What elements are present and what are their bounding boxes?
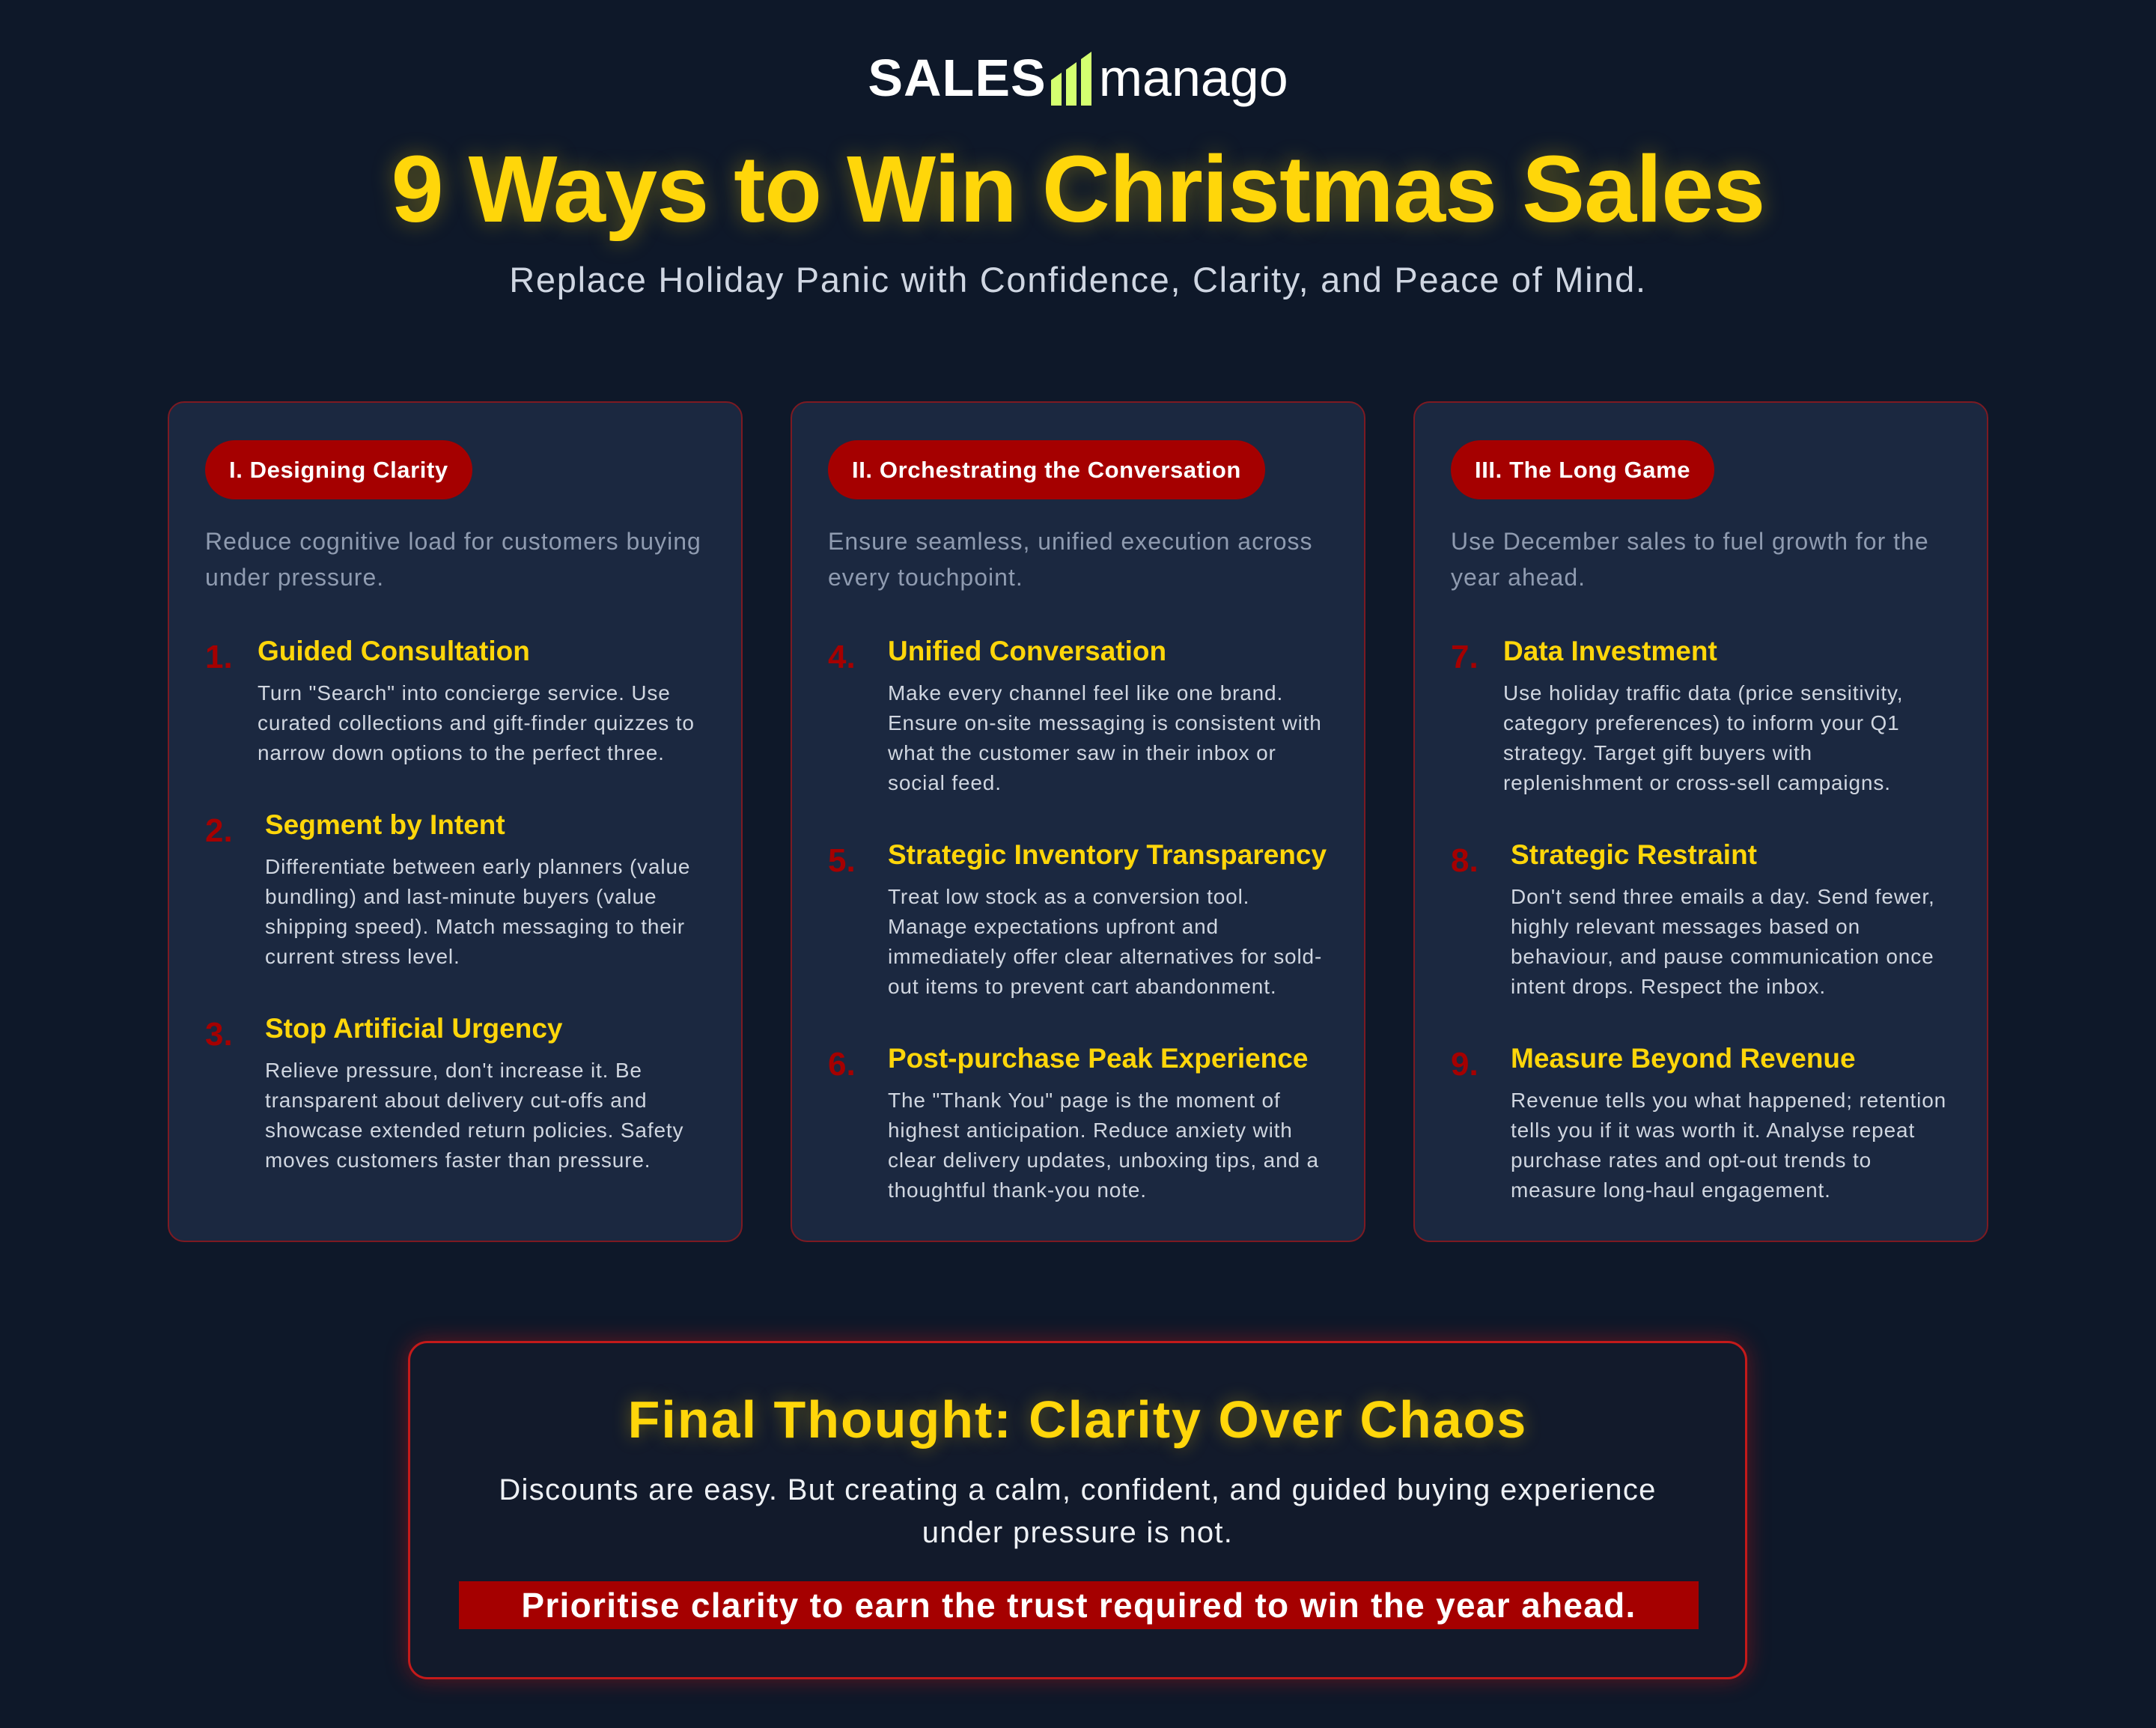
item 1: 1. <box>205 639 233 675</box>
panel description: Reduce cognitive load for customers buying under pressure. <box>205 528 701 591</box>
title: 9 Ways to Win Christmas Sales <box>392 136 1764 242</box>
item 4 <box>828 636 1322 794</box>
item 5 <box>828 839 1327 998</box>
item 4: Unified Conversation <box>888 636 1166 666</box>
final text <box>499 1473 1657 1549</box>
pill heading <box>828 440 1265 499</box>
item 7: Use holiday traffic data (price sensitivity, category preferences) to inform your Q1 strategy. Target gift buyers with replenishment or cross-sell campaigns. <box>1503 681 1903 794</box>
item 3: 3. <box>205 1016 233 1053</box>
logo: SALES <box>868 49 1047 107</box>
panel description: Ensure seamless, unified execution across every touchpoint. <box>828 528 1313 591</box>
item 9 <box>1451 1043 1946 1202</box>
panel description: Use December sales to fuel growth for the year ahead. <box>1451 528 1929 591</box>
red banner: Prioritise clarity to earn the trust required to win the year ahead. <box>521 1586 1636 1625</box>
pill heading: I. Designing Clarity <box>229 457 448 483</box>
pill heading <box>205 440 472 499</box>
item 7 <box>1451 636 1903 794</box>
item 6: Post-purchase Peak Experience <box>888 1043 1308 1074</box>
item 2: Differentiate between early planners (value bundling) and last-minute buyers (value shipping speed). Match messaging to their current stress level. <box>265 855 690 968</box>
panel: designing clarity <box>168 401 743 1242</box>
item 2: Segment by Intent <box>265 809 505 840</box>
logo <box>868 49 1288 107</box>
pill heading: III. The Long Game <box>1475 457 1690 483</box>
item 3: Stop Artificial Urgency <box>265 1013 562 1044</box>
pill heading: II. Orchestrating the Conversation <box>852 457 1241 483</box>
item 6 <box>828 1043 1319 1202</box>
item 9: Revenue tells you what happened; retention tells you if it was worth it. Analyse repeat purchase rates and opt-out trends to measure long-haul engagement. <box>1511 1089 1946 1202</box>
item 8: Don't send three emails a day. Send fewer, highly relevant messages based on behaviour, and pause communication once intent drops. Respect the inbox. <box>1511 885 1935 998</box>
item 2 <box>205 809 690 968</box>
item 8: 8. <box>1451 842 1479 879</box>
panel: orchestrating the conversation <box>791 401 1365 1242</box>
item 1 <box>205 636 695 764</box>
item 8 <box>1451 839 1935 998</box>
item 9: Measure Beyond Revenue <box>1511 1043 1856 1074</box>
item 4: Make every channel feel like one brand. Ensure on-site messaging is consistent with what the customer saw in their inbox or social feed. <box>888 681 1322 794</box>
item 3: Relieve pressure, don't increase it. Be transparent about delivery cut-offs and showcase extended return policies. Safety moves customers faster than pressure. <box>265 1059 683 1172</box>
subtitle: Replace Holiday Panic with Confidence, Clarity, and Peace of Mind. <box>509 260 1647 299</box>
panel: the long game <box>1413 401 1988 1242</box>
item 2: 2. <box>205 812 233 849</box>
callout: final thought <box>408 1341 1747 1679</box>
item 5: 5. <box>828 842 856 879</box>
item 5: Strategic Inventory Transparency <box>888 839 1327 870</box>
item 7: Data Investment <box>1503 636 1717 666</box>
item 4: 4. <box>828 639 856 675</box>
item 5: Treat low stock as a conversion tool. Manage expectations upfront and immediately offer clear alternatives for sold-out items to prevent cart abandonment. <box>888 885 1322 998</box>
item 1: Guided Consultation <box>258 636 530 666</box>
item 9: 9. <box>1451 1046 1479 1083</box>
final text: under pressure is not. <box>922 1516 1233 1549</box>
item 3 <box>205 1013 683 1172</box>
item 7: 7. <box>1451 639 1479 675</box>
final heading: Final Thought: Clarity Over Chaos <box>628 1390 1527 1449</box>
item 6: 6. <box>828 1046 856 1083</box>
logo: manago <box>1099 49 1288 107</box>
item 8: Strategic Restraint <box>1511 839 1757 870</box>
pill heading <box>1451 440 1714 499</box>
final text: Discounts are easy. But creating a calm, confident, and guided buying experience <box>499 1473 1657 1506</box>
item 6: The "Thank You" page is the moment of highest anticipation. Reduce anxiety with clear delivery updates, unboxing tips, and a thoughtful thank-you note. <box>888 1089 1319 1202</box>
item 1: Turn "Search" into concierge service. Use curated collections and gift-finder quizzes to narrow down options to the perfect three. <box>258 681 695 764</box>
